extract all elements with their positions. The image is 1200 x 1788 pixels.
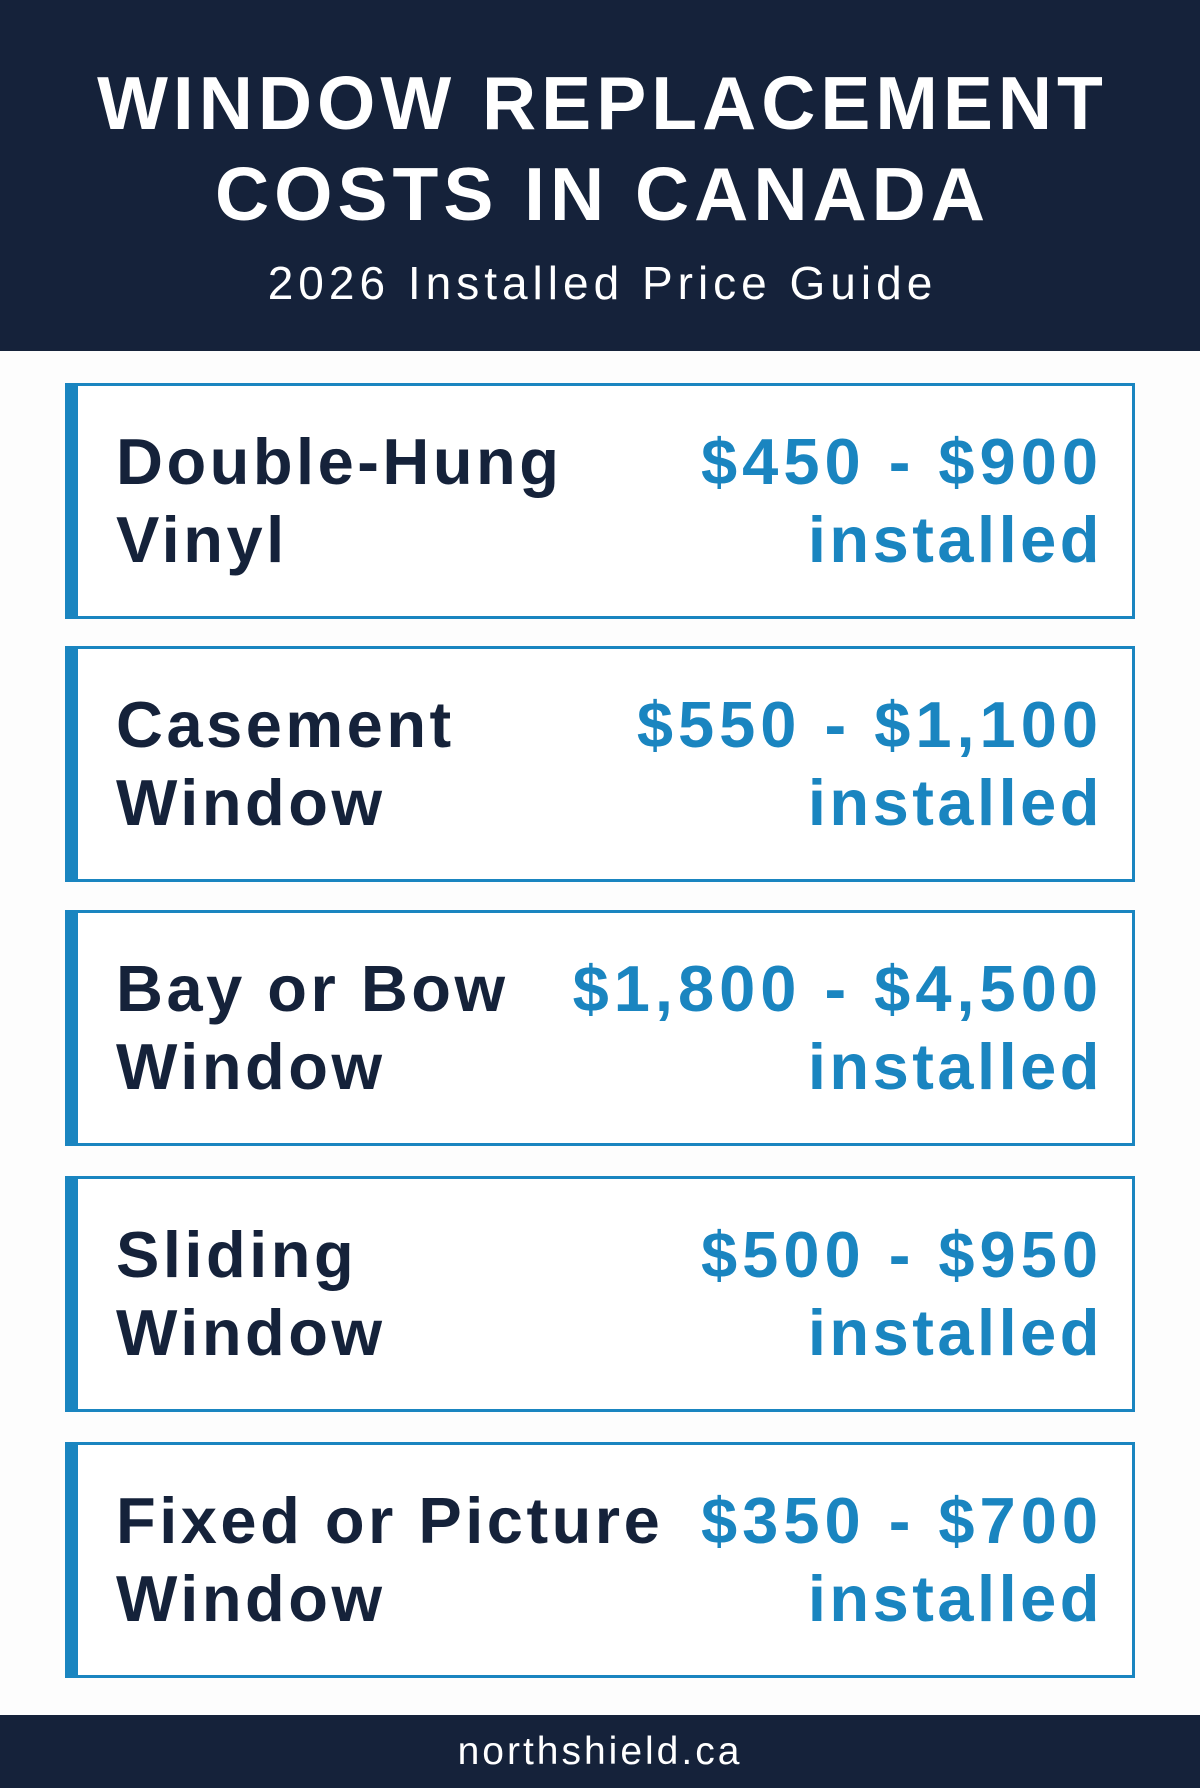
price: installed — [808, 503, 1103, 576]
price: $450 - $900 — [701, 425, 1103, 498]
label: Window — [116, 766, 386, 839]
footer — [0, 1715, 1200, 1788]
price: $1,800 - $4,500 — [573, 952, 1103, 1025]
label — [116, 1484, 663, 1635]
card: casement — [65, 646, 1135, 882]
card: bay or bow — [65, 910, 1135, 1146]
subtitle: 2026 Installed Price Guide — [268, 257, 937, 309]
title line 1: WINDOW REPLACEMENT — [97, 61, 1108, 145]
price: $350 - $700 — [701, 1484, 1103, 1557]
label: Fixed or Picture — [116, 1484, 663, 1557]
price: $550 - $1,100 — [637, 688, 1103, 761]
label — [116, 1218, 386, 1369]
price — [573, 952, 1103, 1103]
card: sliding — [65, 1176, 1135, 1412]
card: fixed — [65, 1442, 1135, 1678]
price: installed — [808, 766, 1103, 839]
label — [116, 425, 562, 576]
price: installed — [808, 1562, 1103, 1635]
label: Bay or Bow — [116, 952, 509, 1025]
price: $500 - $950 — [701, 1218, 1103, 1291]
price — [701, 1218, 1103, 1369]
header — [0, 0, 1200, 351]
label: Window — [116, 1030, 386, 1103]
price — [701, 1484, 1103, 1635]
label — [116, 952, 509, 1103]
title line 2: COSTS IN CANADA — [215, 152, 990, 236]
price: installed — [808, 1296, 1103, 1369]
label: Double-Hung — [116, 425, 562, 498]
card: double-hung — [65, 383, 1135, 619]
footer: northshield.ca — [458, 1730, 742, 1773]
label — [116, 688, 455, 839]
price — [701, 425, 1103, 576]
price — [637, 688, 1103, 839]
label: Sliding — [116, 1218, 357, 1291]
price: installed — [808, 1030, 1103, 1103]
label: Vinyl — [116, 503, 288, 576]
label: Window — [116, 1296, 386, 1369]
label: Casement — [116, 688, 455, 761]
label: Window — [116, 1562, 386, 1635]
